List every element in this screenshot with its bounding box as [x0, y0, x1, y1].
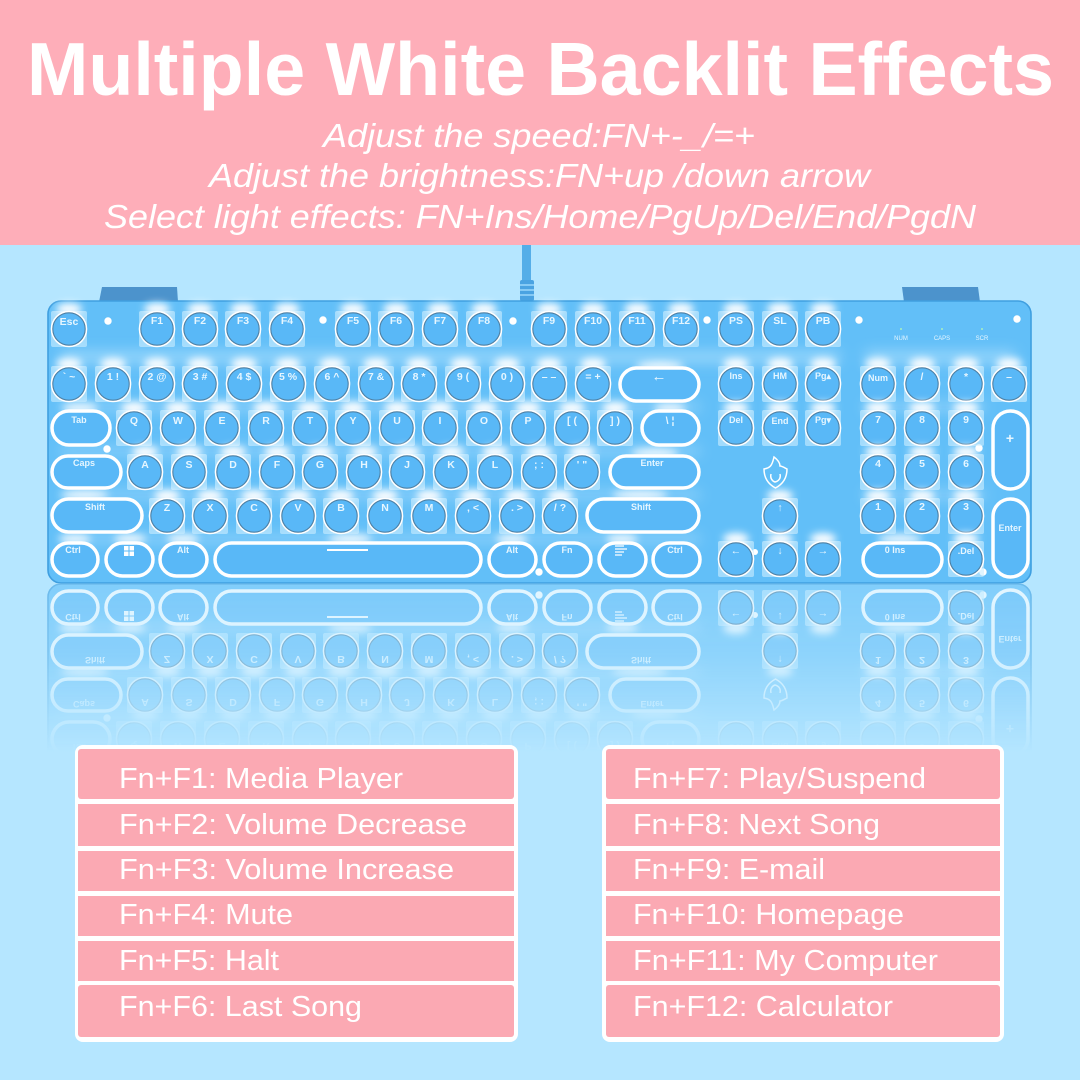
number key row: 3 #	[193, 371, 207, 383]
ASDF key row: 5	[919, 458, 925, 470]
QWERTY key row: Tab	[71, 415, 87, 425]
ZXCV key row: Z	[164, 502, 171, 514]
ASDF key row: Enter	[640, 458, 664, 468]
ZXCV key row: 2	[919, 501, 925, 513]
bottom key row: .Del	[958, 546, 974, 556]
number key row: *	[964, 371, 969, 383]
keyboard	[48, 301, 1031, 583]
QWERTY key row: I	[439, 415, 442, 427]
ASDF key row: Caps	[73, 458, 95, 468]
number key row: Num	[868, 373, 888, 383]
ASDF key row: 6	[963, 458, 969, 470]
number key row: HM	[773, 371, 787, 381]
ASDF key row: S	[185, 459, 193, 471]
number key row: – –	[542, 371, 556, 383]
number key row: ` ~	[63, 371, 75, 383]
ASDF key row: A	[141, 459, 149, 471]
space bar mark	[327, 549, 368, 551]
function key row: F11	[628, 315, 646, 327]
QWERTY key row: ] )	[610, 415, 620, 427]
ASDF key row: H	[360, 459, 368, 471]
number key row: 2 @	[148, 371, 166, 383]
ZXCV key row: 1	[875, 501, 881, 513]
bottom key row	[52, 533, 984, 577]
keyboard cable	[520, 245, 534, 301]
QWERTY key row: Q	[130, 415, 138, 427]
bottom key row: →	[818, 545, 828, 557]
number key row: /	[921, 371, 924, 383]
QWERTY key row: Pg▾	[815, 415, 831, 425]
row text F8: Fn+F8: Next Song	[633, 809, 880, 841]
number key row: Ins	[729, 371, 743, 381]
function key row: F4	[281, 315, 293, 327]
function key row: F7	[434, 315, 446, 327]
row text F9: Fn+F9: E-mail	[633, 854, 825, 886]
number key row: 6 ^	[325, 371, 339, 383]
QWERTY key row: R	[262, 415, 270, 427]
function key row: F6	[390, 315, 402, 327]
keyboard feet tabs	[99, 287, 980, 302]
row text F7: Fn+F7: Play/Suspend	[633, 763, 926, 795]
row text F4: Fn+F4: Mute	[119, 899, 293, 931]
QWERTY key row: 9	[963, 414, 969, 426]
function key row: F3	[237, 315, 249, 327]
number key row: 1 !	[107, 371, 119, 383]
status LEDs: CAPS	[934, 336, 950, 342]
ZXCV key row: V	[294, 502, 302, 514]
bottom key row: Alt	[177, 545, 189, 555]
number key row: = +	[585, 371, 601, 383]
indicator dots	[103, 315, 1021, 576]
glow behind large keys	[59, 361, 922, 544]
row text F12: Fn+F12: Calculator	[633, 991, 893, 1023]
function key row: F2	[194, 315, 206, 327]
subtitle: light effects: Select light effects: FN+Ins/Home/PgUp/Del/End/PgdN	[104, 198, 976, 235]
number key row: 4 $	[237, 371, 251, 383]
number key row: –	[1006, 371, 1012, 383]
function key row: F12	[672, 315, 690, 327]
ZXCV key row: . >	[511, 502, 523, 514]
row text F6: Fn+F6: Last Song	[119, 991, 362, 1023]
status LEDs: NUM	[894, 336, 908, 342]
ZXCV key row: C	[250, 502, 258, 514]
ZXCV key row: N	[381, 502, 389, 514]
QWERTY key row: U	[393, 415, 401, 427]
ASDF key row: ' "	[577, 459, 587, 471]
number key row	[51, 358, 1027, 402]
QWERTY key row: 7	[875, 414, 881, 426]
keyboard body	[48, 301, 1031, 583]
haze between key rows	[60, 352, 1015, 542]
number key row: 8 *	[413, 371, 426, 383]
ZXCV key row: X	[206, 502, 214, 514]
ZXCV key row: , <	[467, 502, 479, 514]
ZXCV key row: Enter	[998, 523, 1022, 533]
subtitle: speed: Adjust the speed:FN+-_/=+	[321, 117, 755, 154]
number key row: Pg▴	[815, 371, 831, 381]
function key row: F9	[543, 315, 555, 327]
number key row: 9 (	[457, 371, 470, 383]
QWERTY key row: Del	[729, 415, 743, 425]
number key row: ←	[652, 368, 666, 385]
ZXCV key row: ↑	[777, 502, 783, 514]
panel: Fn shortcuts F1 to F6	[75, 745, 518, 1042]
ZXCV key row: Shift	[85, 502, 105, 512]
function key row	[51, 303, 841, 347]
title: Multiple White Backlit Effects	[27, 27, 1054, 111]
status LEDs	[894, 328, 989, 342]
ASDF key row: G	[316, 459, 324, 471]
row text F5: Fn+F5: Halt	[119, 945, 279, 977]
icon: windows key	[124, 546, 134, 556]
QWERTY key row: Y	[349, 415, 357, 427]
number key row: 0 )	[501, 371, 513, 383]
row text F2: Fn+F2: Volume Decrease	[119, 809, 467, 841]
ASDF key row: ; :	[534, 459, 544, 471]
ASDF key row: 4	[875, 458, 881, 470]
ASDF key row: J	[404, 459, 410, 471]
bottom key row: Fn	[562, 545, 572, 555]
ASDF key row: F	[274, 459, 281, 471]
number key row: 7 &	[368, 371, 385, 383]
ASDF key row: D	[229, 459, 237, 471]
bottom key row: Ctrl	[667, 545, 683, 555]
status LEDs: SCR	[976, 336, 989, 342]
ASDF key row: K	[447, 459, 455, 471]
bottom key row: ←	[731, 545, 741, 557]
ASDF key row: L	[492, 459, 499, 471]
ZXCV key row: 3	[963, 501, 969, 513]
QWERTY key row: \ ¦	[666, 415, 674, 427]
ZXCV key row	[52, 490, 1028, 577]
ZXCV key row: M	[425, 502, 434, 514]
subtitle: brightness: Adjust the brightness:FN+up /down arrow	[207, 157, 872, 194]
QWERTY key row	[52, 402, 1028, 489]
bottom key row: 0 Ins	[885, 545, 905, 555]
function key row: PB	[816, 315, 831, 327]
row text F10: Fn+F10: Homepage	[633, 899, 904, 931]
function key row: SL	[773, 315, 787, 327]
number key row: 5 %	[279, 371, 298, 383]
ZXCV key row: / ?	[554, 502, 566, 514]
ASDF key row	[52, 446, 984, 490]
function key row: F1	[151, 315, 163, 327]
bottom key row: ↓	[777, 545, 783, 557]
panel: Fn shortcuts F7 to F12	[602, 745, 1004, 1042]
row text F11: Fn+F11: My Computer	[633, 945, 938, 977]
keyboard reflection	[47, 584, 1032, 738]
ZXCV key row: B	[337, 502, 345, 514]
QWERTY key row: [ (	[567, 415, 577, 427]
QWERTY key row: +	[1006, 430, 1014, 446]
QWERTY key row: W	[173, 415, 183, 427]
bottom key row: Ctrl	[65, 545, 81, 555]
function key row: F8	[478, 315, 490, 327]
QWERTY key row: P	[524, 415, 532, 427]
function key row: Esc	[60, 316, 78, 328]
row text F3: Fn+F3: Volume Increase	[119, 854, 454, 886]
QWERTY key row: T	[307, 415, 314, 427]
bottom key row: Alt	[506, 545, 518, 555]
header banner	[0, 0, 1080, 245]
QWERTY key row: 8	[919, 414, 925, 426]
function key row: PS	[729, 315, 743, 327]
logo: flame shield	[764, 457, 787, 488]
function key row: F10	[584, 315, 602, 327]
QWERTY key row: End	[772, 416, 788, 426]
icon: menu key	[615, 546, 627, 555]
QWERTY key row: O	[480, 415, 488, 427]
function key row: F5	[347, 315, 359, 327]
row text F1: Fn+F1: Media Player	[119, 763, 403, 795]
ZXCV key row: Shift	[631, 502, 651, 512]
QWERTY key row: E	[218, 415, 226, 427]
